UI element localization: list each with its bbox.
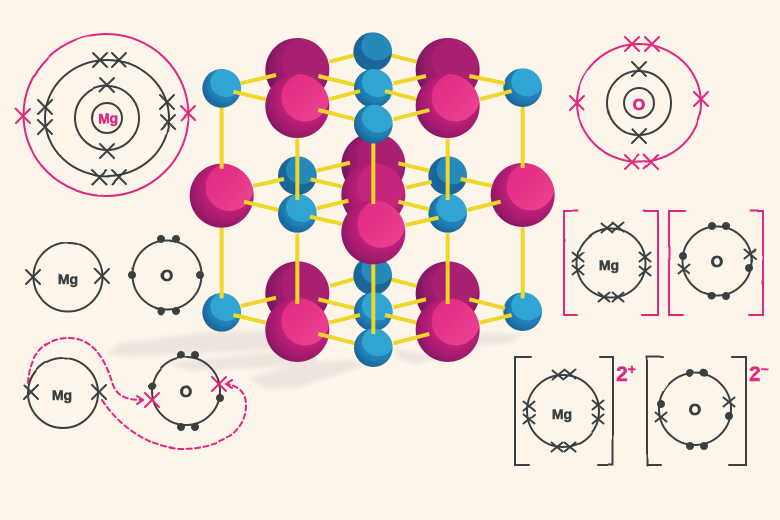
charge 2+: 2 (616, 363, 628, 386)
electron transfer diagram: Mg (52, 387, 72, 403)
Mg 2+ ion: Mg (552, 406, 572, 422)
pink bracketed Mg (564, 211, 658, 315)
electron transfer diagram: O (180, 384, 192, 401)
O outer shell (128, 235, 204, 315)
Mg 2+ ion (515, 357, 636, 465)
ionic lattice (190, 31, 555, 367)
O outer shell: O (161, 268, 173, 285)
electron transfer diagram (24, 338, 246, 449)
O 2- ion (647, 357, 769, 465)
pink bracketed Mg: Mg (599, 257, 619, 273)
lattice shadow (107, 330, 522, 390)
pink bracketed O (669, 211, 763, 315)
charge 2+: + (628, 361, 636, 377)
charge 2-: − (761, 361, 769, 377)
Mg electron shell diagram: Mg (98, 110, 118, 126)
Mg outer shell (26, 242, 109, 312)
lattice top layer (202, 31, 543, 143)
charge 2-: 2 (749, 363, 761, 386)
Mg outer shell: Mg (58, 271, 78, 287)
Mg electron shell diagram (16, 34, 195, 196)
O electron shell diagram (570, 37, 708, 169)
lattice bottom layer (202, 227, 543, 367)
O 2- ion: O (689, 402, 701, 419)
O electron shell diagram: O (633, 97, 645, 114)
lattice middle layer (190, 107, 555, 264)
pink bracketed O: O (711, 254, 723, 271)
